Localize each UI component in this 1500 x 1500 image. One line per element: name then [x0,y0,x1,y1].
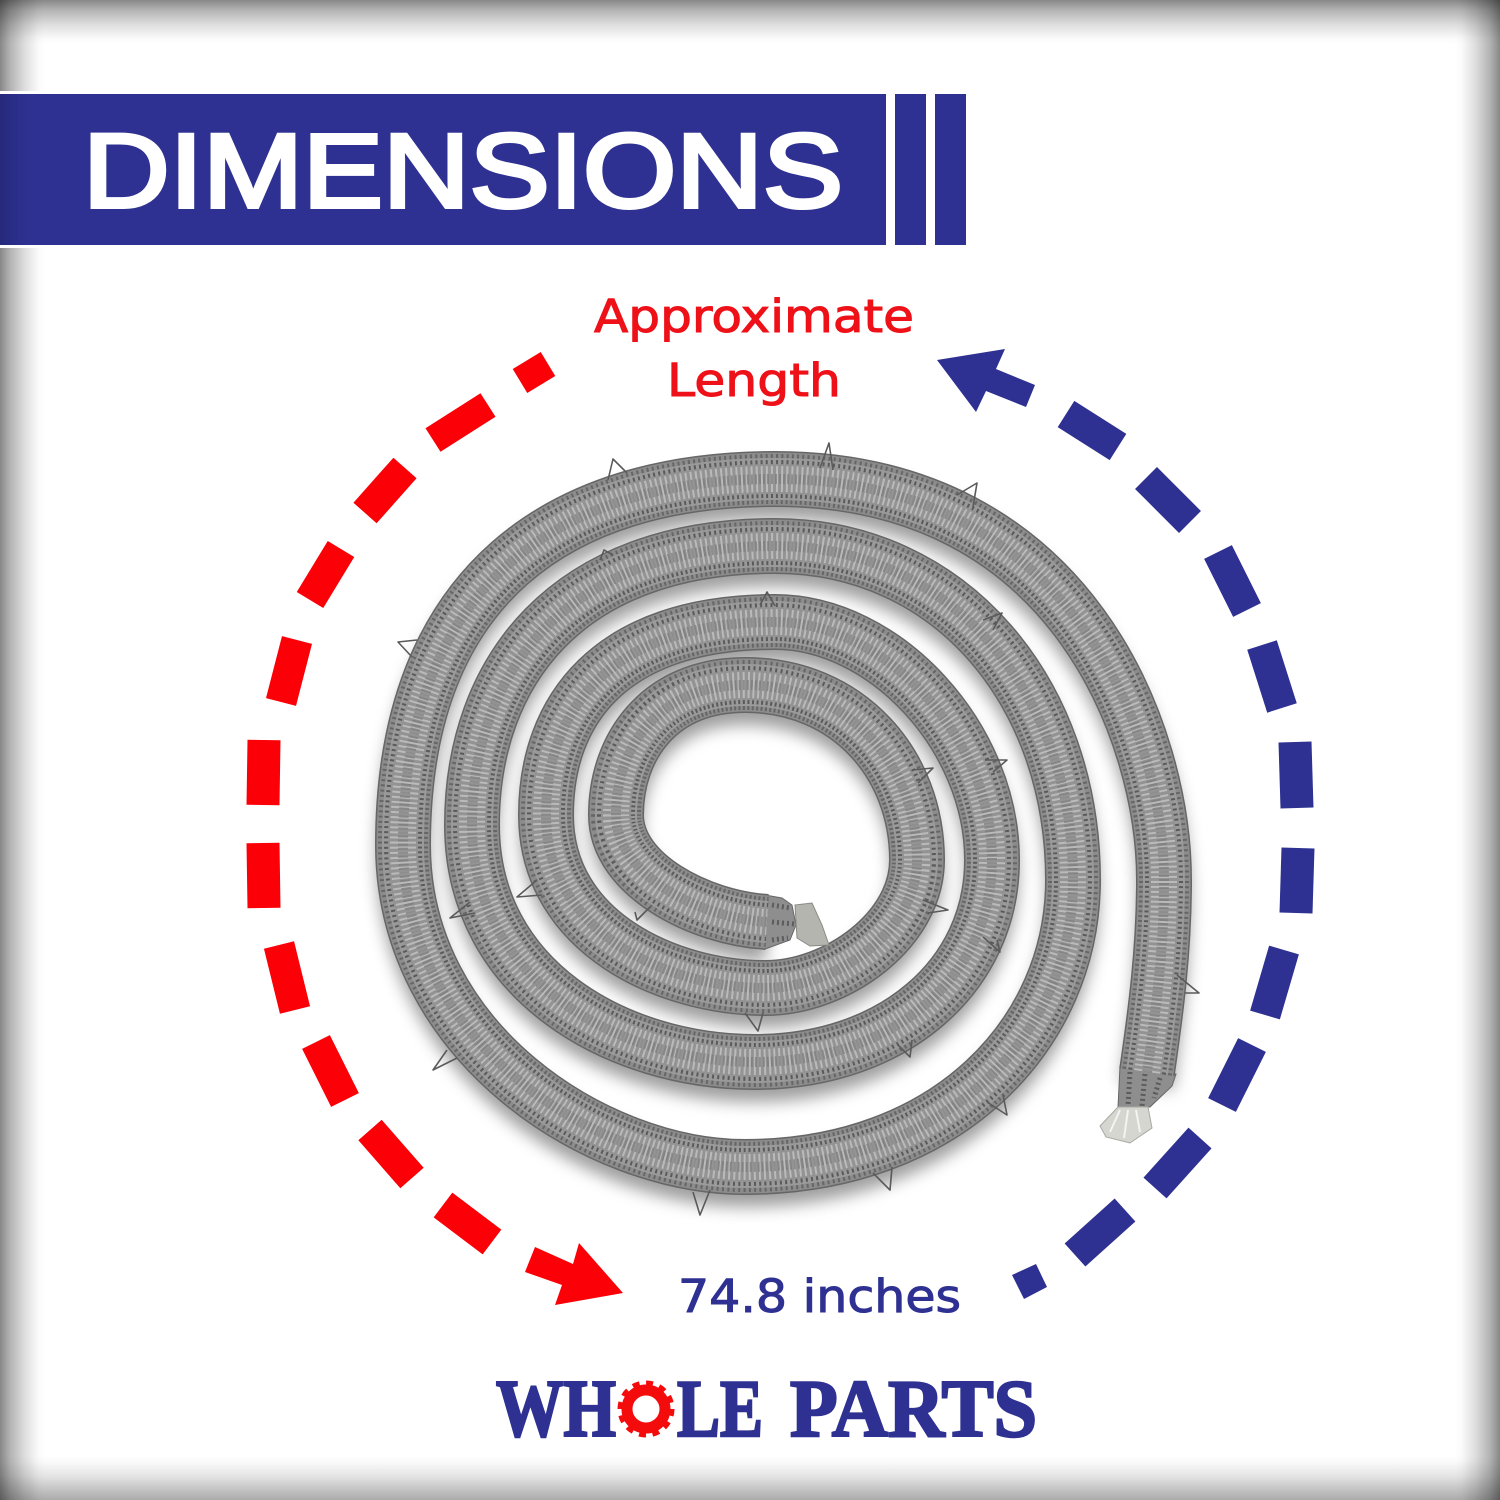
title banner [0,91,968,248]
red arrow head [525,1243,623,1305]
length value: 74.8 inches [678,1270,961,1323]
dashed blue arrow [937,349,1298,1299]
tube end caps [765,895,1176,1107]
brand logo [496,1363,1037,1454]
heading: approximate length [594,290,914,407]
coiled braided gasket [398,443,1199,1215]
dashed red arrow [263,364,623,1305]
title text: DIMENSIONS [83,113,843,230]
frayed end: outer [1100,1107,1152,1143]
blue arrow head [937,349,1035,412]
frayed end: centre [795,903,829,946]
heading: approximate length: Length [667,354,841,407]
brand logo: LE [677,1363,763,1454]
brand logo: PARTS [790,1363,1037,1454]
icon: red gear [620,1383,672,1435]
brand logo: WH [496,1363,616,1454]
wire clips [398,443,1199,1215]
heading: approximate length: Approximate [594,290,914,343]
